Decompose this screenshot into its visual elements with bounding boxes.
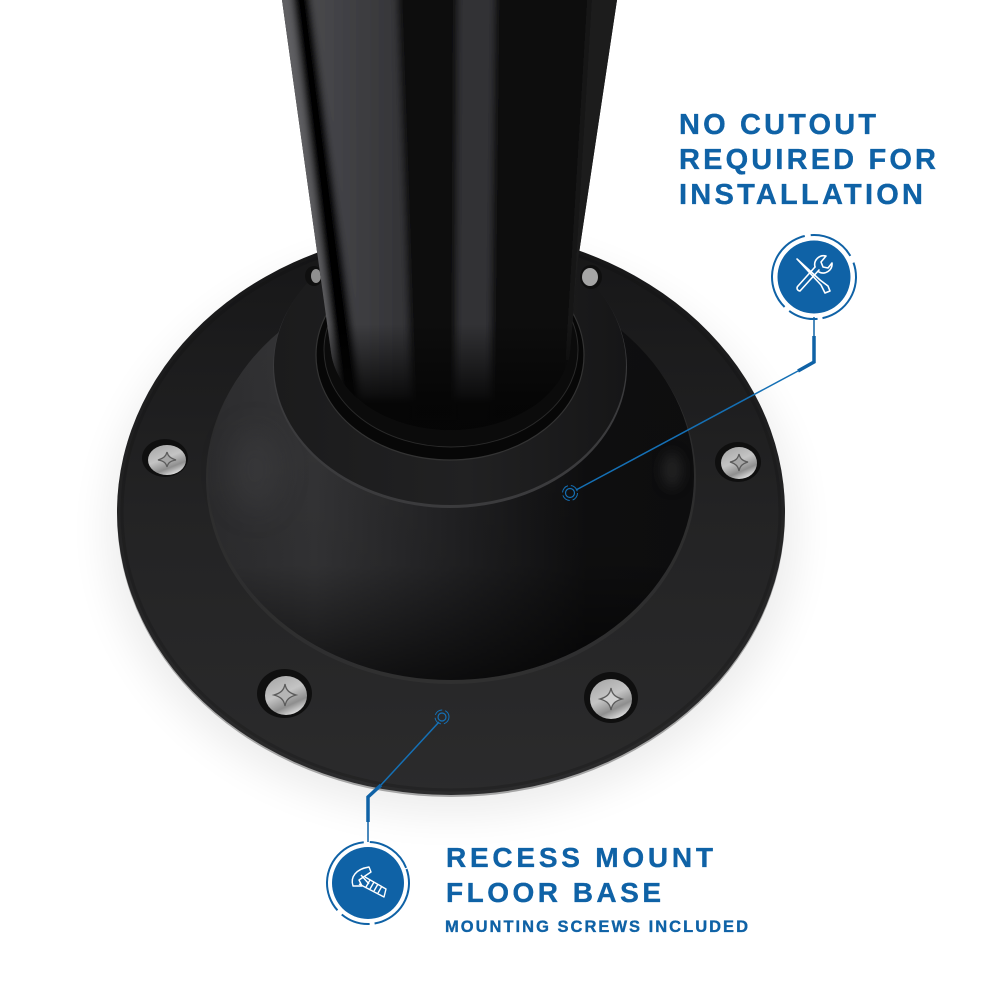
heading: no cutout: NO CUTOUT: [679, 109, 876, 141]
screw: left: [142, 439, 188, 477]
screw: rear left: [305, 266, 323, 286]
recessed dome: [206, 272, 696, 684]
heading: recess mount: RECESS MOUNT: [446, 842, 713, 873]
callout connector: recess mount: [368, 710, 449, 842]
floor base plate: [117, 229, 785, 797]
screw: right: [715, 442, 761, 482]
screw: bottom right: [584, 672, 638, 723]
pole: [282, 0, 617, 388]
callout icon: screw: [315, 830, 421, 936]
screw: rear right: [580, 265, 602, 289]
screw: bottom left: [257, 669, 312, 718]
callout connector: no cutout: [562, 317, 814, 500]
heading: recess mount: [446, 842, 713, 908]
subheading: mounting screws: MOUNTING SCREWS INCLUDED: [445, 918, 748, 936]
collar ring: [273, 225, 627, 508]
heading: no cutout: INSTALLATION: [679, 179, 923, 211]
pole opening: [316, 250, 584, 460]
heading: no cutout: [679, 109, 936, 211]
floor shadow: [107, 245, 797, 815]
heading: recess mount: FLOOR BASE: [446, 877, 661, 908]
heading: no cutout: REQUIRED FOR: [679, 144, 936, 176]
callout icon: wrench and screwdriver: [760, 223, 868, 331]
